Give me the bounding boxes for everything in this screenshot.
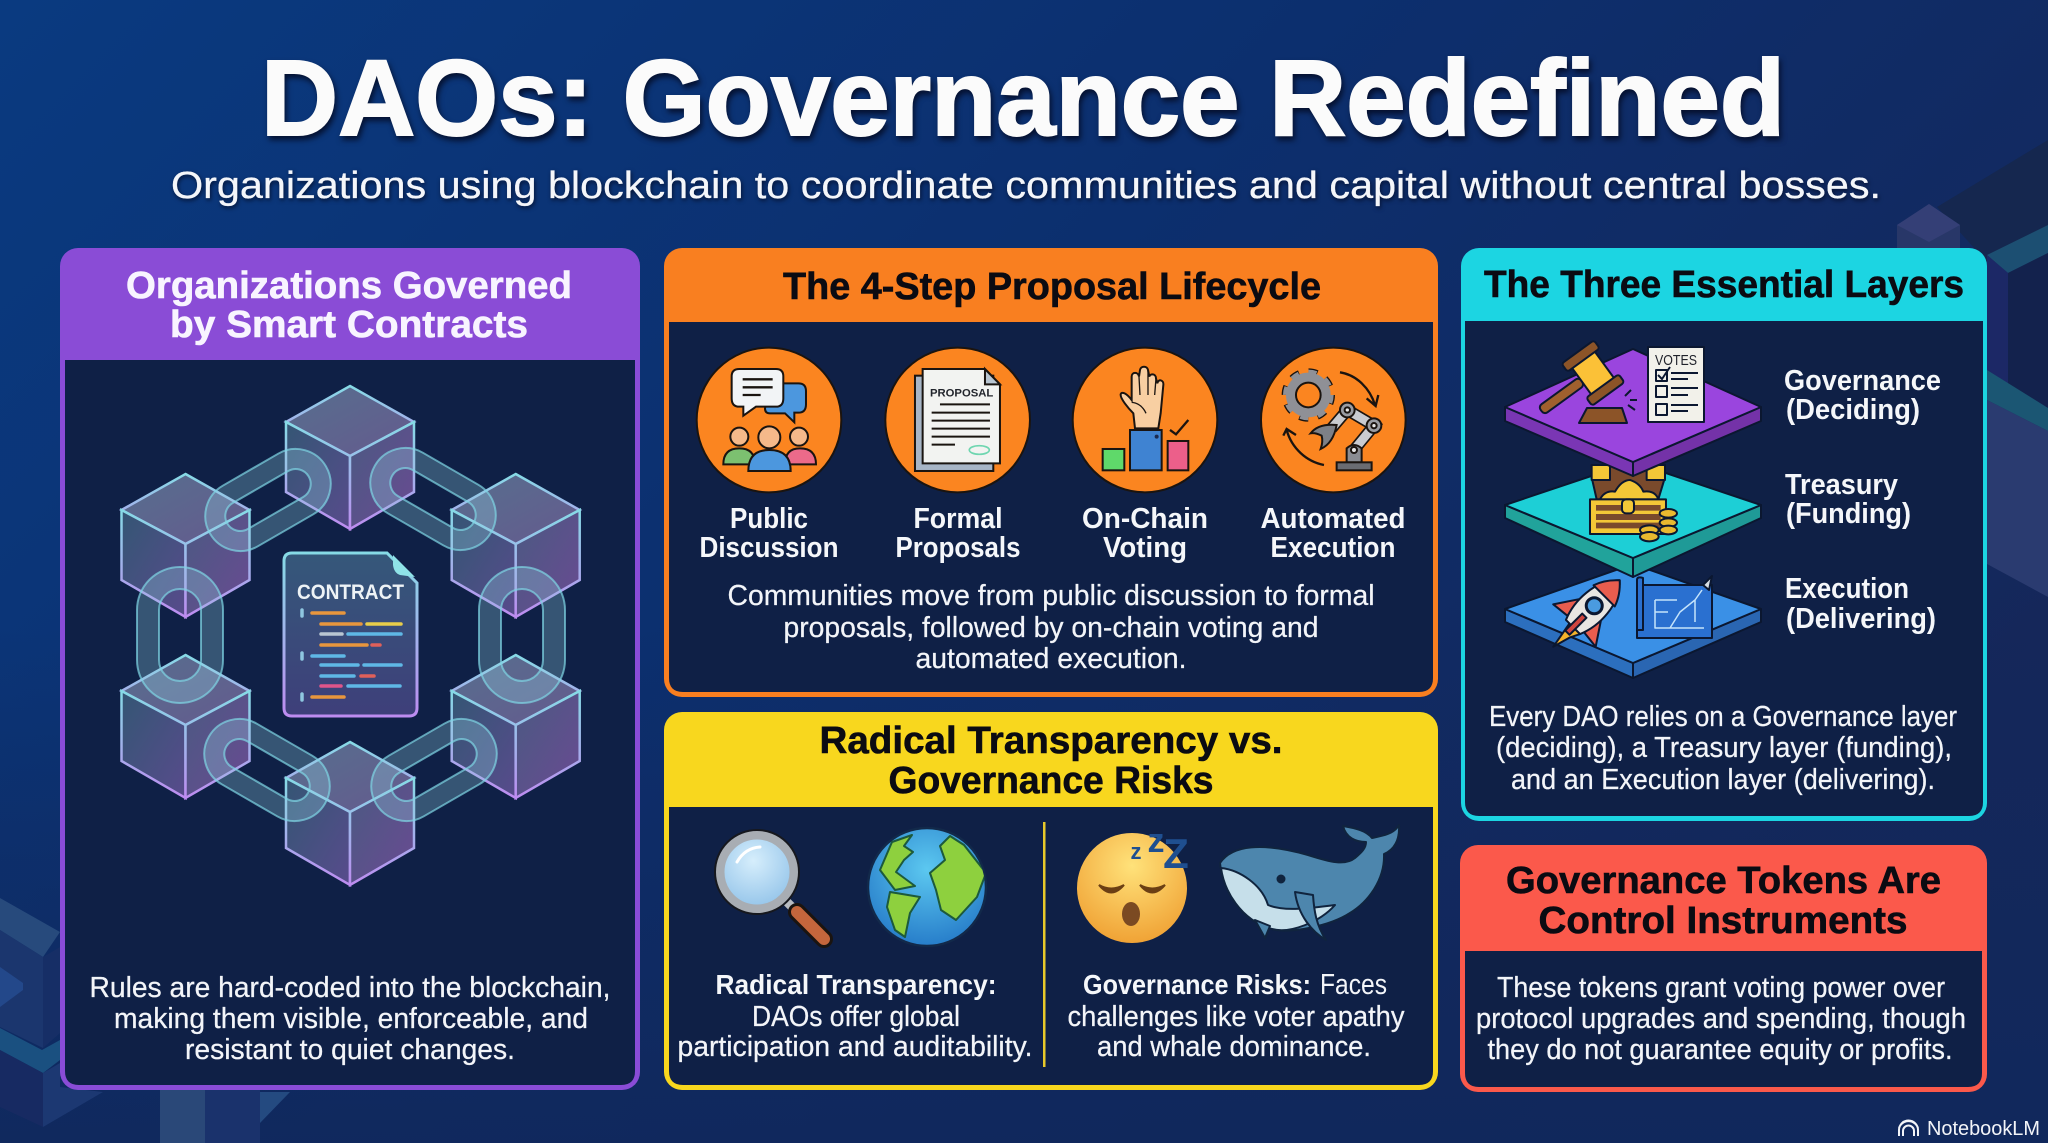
text: radical transparency: Radical Transparency: <box>716 969 996 1000</box>
body text: tokens: These tokens grant voting power over <box>1497 972 1945 1004</box>
body text: smart contracts: Rules are hard-coded into the blockchain, <box>90 972 610 1004</box>
heading: transparency vs risks <box>820 720 1282 802</box>
icon: sleeping face <box>1077 822 1189 943</box>
icon: sleeping face: z <box>1148 822 1164 860</box>
body text: smart contracts: making them visible, enforceable, and <box>114 1003 588 1035</box>
heading: tokens: Control Instruments <box>1538 900 1908 942</box>
icon: contract document <box>284 553 417 716</box>
icon: whale <box>1220 825 1399 940</box>
body text: lifecycle <box>728 580 1374 675</box>
body text: layers: Every DAO relies on a Governance layer <box>1489 701 1957 733</box>
heading: smart contracts: Organizations Governed <box>126 265 572 307</box>
layer labels <box>1784 365 1941 635</box>
body text: tokens: they do not guarantee equity or profits. <box>1488 1034 1952 1066</box>
text: radical transparency: participation and auditability. <box>678 1031 1032 1063</box>
body text: smart contracts <box>90 972 610 1066</box>
layer labels: (Funding) <box>1786 498 1911 530</box>
body text: tokens <box>1476 972 1966 1066</box>
layer: governance <box>1505 340 1761 476</box>
diagram: blockchain ring of cubes and links <box>122 386 580 885</box>
body text: tokens: protocol upgrades and spending, though <box>1476 1003 1966 1035</box>
heading: tokens <box>1506 860 1941 942</box>
heading: tokens: Governance Tokens Are <box>1506 860 1941 902</box>
body text: layers: and an Execution layer (delivering). <box>1511 764 1935 796</box>
step labels: Execution <box>1270 532 1396 564</box>
body text: lifecycle: proposals, followed by on-chain voting and <box>784 612 1318 644</box>
body text: lifecycle: automated execution. <box>916 643 1186 675</box>
icon: globe <box>868 828 986 946</box>
step labels: On-Chain <box>1082 503 1208 535</box>
step labels: Proposals <box>896 532 1020 564</box>
diagram: stacked layers <box>1505 340 1761 678</box>
panel: smart contracts <box>60 248 640 1090</box>
icon: magnifying glass <box>715 830 824 939</box>
icon: on-chain voting hand <box>1073 348 1217 492</box>
panel: governance tokens <box>1460 845 1987 1092</box>
heading: lifecycle: The 4-Step Proposal Lifecycle <box>783 266 1321 308</box>
step labels: Discussion <box>700 532 838 564</box>
layer labels: (Deciding) <box>1786 394 1920 426</box>
layer: treasury <box>1505 462 1761 577</box>
logo: NotebookLM: NotebookLM <box>1927 1118 2040 1140</box>
body text: lifecycle: Communities move from public discussion to formal <box>728 580 1374 612</box>
panel: transparency vs risks <box>664 712 1438 1090</box>
layer: governance: VOTES <box>1655 352 1697 369</box>
subtitle: Organizations using blockchain to coordinate communities and capital without central bosses. <box>171 165 1881 207</box>
text: governance risks: and whale dominance. <box>1097 1031 1371 1063</box>
panel: proposal lifecycle <box>664 248 1438 697</box>
heading: smart contracts: by Smart Contracts <box>170 304 528 346</box>
step labels <box>700 503 1406 564</box>
title: DAOs: Governance Redefined <box>261 37 1785 158</box>
layer: execution <box>1505 559 1761 678</box>
icon: automated execution robot arm <box>1261 348 1406 492</box>
heading: smart contracts <box>126 265 572 346</box>
step labels: Voting <box>1103 532 1187 564</box>
heading: transparency vs risks: Governance Risks <box>888 760 1214 802</box>
icon: proposal document: PROPOSAL <box>930 388 994 400</box>
step labels: Public <box>730 503 808 535</box>
text: governance risks <box>1068 969 1405 1063</box>
icon: public discussion <box>697 348 841 492</box>
layer labels: Governance <box>1784 365 1941 397</box>
layer labels: Execution <box>1785 573 1909 605</box>
step labels: Formal <box>914 503 1002 535</box>
text: governance risks: Governance Risks: <box>1083 969 1311 1000</box>
text: radical transparency: DAOs offer global <box>752 1001 960 1033</box>
text: radical transparency <box>678 969 1032 1063</box>
heading: transparency vs risks: Radical Transparency vs. <box>820 720 1282 762</box>
text: governance risks: Faces <box>1320 969 1387 1001</box>
panel: three layers <box>1461 248 1987 821</box>
body text: layers <box>1489 701 1957 796</box>
step labels: Automated <box>1260 503 1406 535</box>
icon: contract document: CONTRACT <box>297 581 404 604</box>
body text: layers: (deciding), a Treasury layer (funding), <box>1496 732 1952 764</box>
icon: proposal document <box>885 348 1030 492</box>
body text: smart contracts: resistant to quiet changes. <box>185 1034 515 1066</box>
heading: layers: The Three Essential Layers <box>1484 264 1964 306</box>
layer labels: (Delivering) <box>1786 603 1936 635</box>
text: governance risks: challenges like voter apathy <box>1068 1001 1405 1033</box>
layer labels: Treasury <box>1785 469 1898 501</box>
icon: sleeping face: Z <box>1163 830 1189 877</box>
icon: sleeping face: z <box>1130 839 1142 864</box>
